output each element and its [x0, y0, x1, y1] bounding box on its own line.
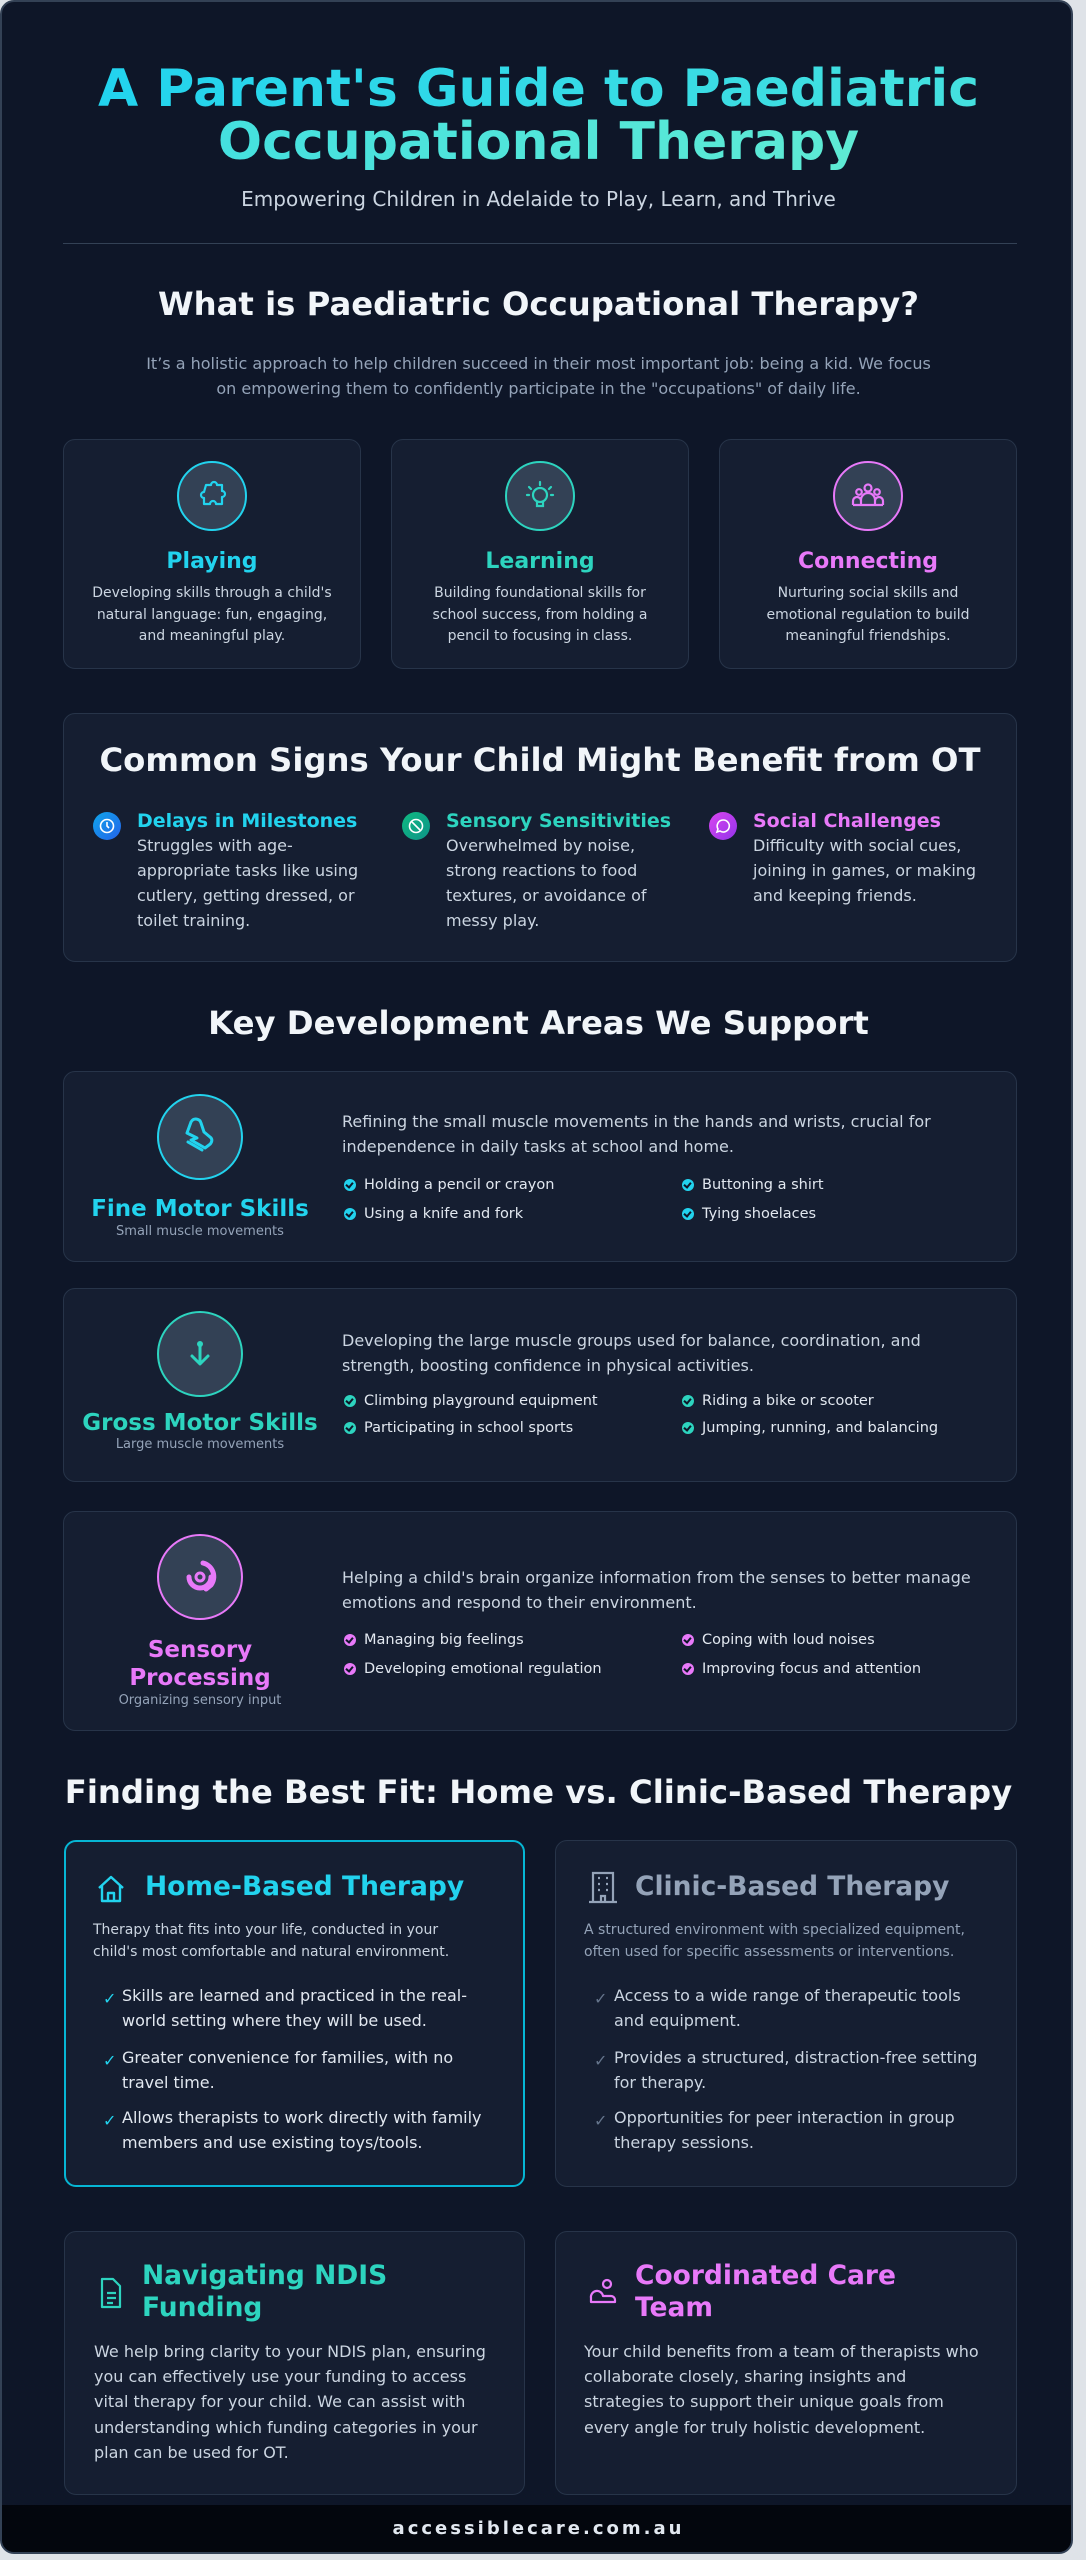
bullet list: Riding a bike or scooter: [702, 1393, 874, 1409]
benefits list: ✓: [103, 2051, 116, 2070]
description: Therapy that fits into your life, conducted in your: [93, 1922, 438, 1938]
bullet list: Tying shoelaces: [702, 1206, 816, 1222]
sign: social: [709, 810, 976, 904]
benefits list: [103, 1986, 482, 2152]
benefits list: ✓: [103, 1989, 116, 2008]
text: messy play.: [446, 910, 539, 930]
text: Struggles with age-: [137, 836, 293, 854]
text: school success, from holding a: [433, 606, 647, 622]
icon: document: [100, 2278, 122, 2308]
panel: fine motor: [63, 1071, 1017, 1262]
benefits list: ✓: [594, 2111, 607, 2130]
bullet list: Buttoning a shirt: [702, 1177, 824, 1193]
text: strong reactions to food: [446, 860, 637, 880]
description: [342, 1568, 971, 1612]
text: cutlery, getting dressed, or: [137, 886, 355, 904]
heading: Home-Based Therapy: [145, 1871, 464, 1902]
heading: Playing: [166, 549, 258, 574]
benefits list: ✓: [594, 2051, 607, 2070]
panel: NDIS funding: [64, 2231, 525, 2495]
heading: home vs clinic: Finding the Best Fit: Home vs. Clinic-Based Therapy: [65, 1773, 1012, 1811]
text: [433, 585, 647, 644]
subtitle: Empowering Children in Adelaide to Play, Learn, and Thrive: [241, 187, 836, 211]
icon: puzzle: [177, 461, 247, 531]
heading: Navigating NDIS: [142, 2260, 387, 2291]
benefits list: Allows therapists to work directly with family: [122, 2108, 482, 2127]
heading: Clinic-Based Therapy: [635, 1871, 949, 1902]
panel: home-based: [64, 1840, 525, 2187]
benefits list: ✓: [103, 2111, 116, 2130]
text: [92, 585, 332, 644]
bullet list: Participating in school sports: [364, 1420, 573, 1436]
benefits list: members and use existing toys/tools.: [122, 2133, 422, 2152]
text: Building foundational skills for: [434, 585, 646, 601]
description: [342, 1112, 931, 1156]
icon: people: [833, 461, 903, 531]
text: emotional regulation to build: [766, 606, 970, 622]
text: Your child benefits from a team of therapists who: [584, 2342, 979, 2361]
heading: key development areas: Key Development Areas We Support: [208, 1004, 869, 1042]
text: appropriate tasks like using: [137, 860, 358, 880]
description: Helping a child's brain organize information from the senses to better manage: [342, 1568, 971, 1586]
text: Nurturing social skills and: [778, 585, 958, 601]
intro paragraph: on empowering them to confidently participate in the "occupations" of daily life.: [216, 379, 861, 398]
text: vital therapy for your child. We can assist with: [94, 2392, 465, 2411]
heading: [635, 2260, 896, 2323]
bullet list: Managing big feelings: [364, 1632, 524, 1648]
text: [752, 836, 976, 904]
text: [137, 836, 358, 930]
title: Occupational Therapy: [218, 112, 859, 172]
benefits list: Skills are learned and practiced in the real-: [122, 1986, 467, 2005]
description: [92, 1922, 449, 1960]
benefits list: therapy sessions.: [614, 2133, 754, 2152]
text: Difficulty with social cues,: [753, 836, 961, 854]
description: Refining the small muscle movements in the hands and wrists, crucial for: [342, 1112, 931, 1130]
benefits list: Opportunities for peer interaction in group: [614, 2108, 955, 2127]
icon: hand: [157, 1094, 243, 1180]
text: textures, or avoidance of: [446, 886, 647, 904]
icon: house: [98, 1876, 124, 1902]
text: [94, 2342, 486, 2462]
panel: common signs: [63, 713, 1017, 962]
benefits list: travel time.: [122, 2073, 215, 2092]
text: every angle for truly holistic development.: [584, 2418, 925, 2437]
panel: playing: [63, 439, 361, 669]
subheading: Large muscle movements: [116, 1437, 284, 1452]
text: natural language: fun, engaging,: [97, 606, 327, 622]
benefits list: world setting where they will be used.: [122, 2011, 427, 2030]
text: pencil to focusing in class.: [448, 628, 632, 644]
bullet list: Holding a pencil or crayon: [364, 1177, 554, 1193]
panel: coordinated care: [555, 2231, 1017, 2495]
heading: Fine Motor Skills: [91, 1196, 309, 1222]
icon: building: [589, 1872, 617, 1904]
heading: Learning: [485, 549, 595, 574]
panel: sensory processing: [63, 1511, 1017, 1731]
heading: Coordinated Care: [635, 2260, 896, 2291]
heading: Funding: [142, 2292, 262, 2323]
benefits list: Access to a wide range of therapeutic tools: [614, 1986, 961, 2005]
bullet list: [344, 1632, 921, 1677]
icon: sensory swirl: [157, 1534, 243, 1620]
heading: [142, 2260, 387, 2323]
intro paragraph: [146, 354, 931, 398]
title: Social Challenges: [753, 810, 941, 832]
benefits list: and equipment.: [614, 2011, 741, 2030]
benefits list: ✓: [594, 1989, 607, 2008]
subheading: Organizing sensory input: [119, 1693, 281, 1708]
description: [584, 1922, 965, 1960]
bullet list: [344, 1393, 938, 1436]
icon: lightbulb: [505, 461, 575, 531]
title: Delays in Milestones: [137, 810, 357, 832]
heading: Sensory: [148, 1637, 252, 1663]
intro paragraph: It’s a holistic approach to help children succeed in their most important job: being a kid. We focus: [146, 354, 931, 373]
sign: sensory: [402, 810, 671, 930]
bullet list: Coping with loud noises: [702, 1632, 875, 1648]
heading: Gross Motor Skills: [82, 1410, 318, 1436]
text: meaningful friendships.: [785, 628, 951, 644]
description: strength, boosting confidence in physical activities.: [342, 1356, 754, 1374]
text: you can effectively use your funding to access: [94, 2367, 466, 2386]
text: collaborate closely, sharing insights and: [584, 2367, 906, 2386]
title: [98, 59, 979, 172]
icon: chat: [709, 812, 737, 840]
icon: arrow down: [157, 1311, 243, 1397]
description: Developing the large muscle groups used for balance, coordination, and: [342, 1330, 921, 1350]
panel: clinic-based: [555, 1840, 1017, 2187]
benefits list: for therapy.: [614, 2073, 706, 2092]
bullet list: Developing emotional regulation: [364, 1661, 602, 1677]
description: often used for specific assessments or interventions.: [584, 1944, 954, 1960]
text: [766, 585, 970, 644]
bullet list: [344, 1177, 824, 1222]
bullet list: Climbing playground equipment: [364, 1393, 598, 1409]
heading: Team: [635, 2292, 713, 2323]
benefits list: [594, 1986, 977, 2152]
text: [584, 2342, 979, 2437]
benefits list: Provides a structured, distraction-free setting: [614, 2048, 977, 2067]
heading: [129, 1637, 271, 1691]
heading: Common Signs Your Child Might Benefit from OT: [99, 741, 981, 779]
text: and meaningful play.: [139, 628, 285, 644]
text: and keeping friends.: [753, 886, 917, 904]
text: Developing skills through a child's: [92, 585, 332, 601]
title: Sensory Sensitivities: [446, 810, 671, 832]
text: toilet training.: [137, 910, 250, 930]
text: Overwhelmed by noise,: [446, 836, 635, 854]
heading: Connecting: [798, 549, 938, 574]
icon: care team: [590, 2278, 616, 2304]
footer: [2, 2505, 1075, 2557]
subheading: Small muscle movements: [116, 1224, 284, 1239]
bullet list: Improving focus and attention: [702, 1661, 921, 1677]
text: strategies to support their unique goals from: [584, 2392, 944, 2411]
text: [446, 836, 647, 930]
panel: learning: [391, 439, 689, 669]
description: emotions and respond to their environment.: [342, 1592, 697, 1612]
text: understanding which funding categories in your: [94, 2418, 478, 2437]
text: joining in games, or making: [753, 860, 976, 880]
icon: no symbol: [402, 812, 430, 840]
bullet list: Using a knife and fork: [364, 1206, 523, 1222]
description: A structured environment with specialized equipment,: [584, 1922, 965, 1938]
description: independence in daily tasks at school and home.: [342, 1136, 734, 1156]
title: A Parent's Guide to Paediatric: [98, 59, 979, 119]
sign: delays: [93, 810, 358, 930]
benefits list: Greater convenience for families, with no: [122, 2048, 453, 2067]
bullet list: Jumping, running, and balancing: [702, 1420, 938, 1436]
panel: connecting: [719, 439, 1017, 669]
heading: what is OT: What is Paediatric Occupational Therapy?: [158, 285, 919, 323]
heading: Processing: [129, 1665, 271, 1691]
description: [342, 1330, 921, 1374]
description: child's most comfortable and natural environment.: [93, 1944, 449, 1960]
text: plan can be used for OT.: [94, 2443, 289, 2462]
icon: clock: [93, 812, 121, 840]
footer: accessiblecare.com.au: [393, 2518, 684, 2539]
text: We help bring clarity to your NDIS plan, ensuring: [94, 2342, 486, 2361]
panel: gross motor: [63, 1288, 1017, 1482]
